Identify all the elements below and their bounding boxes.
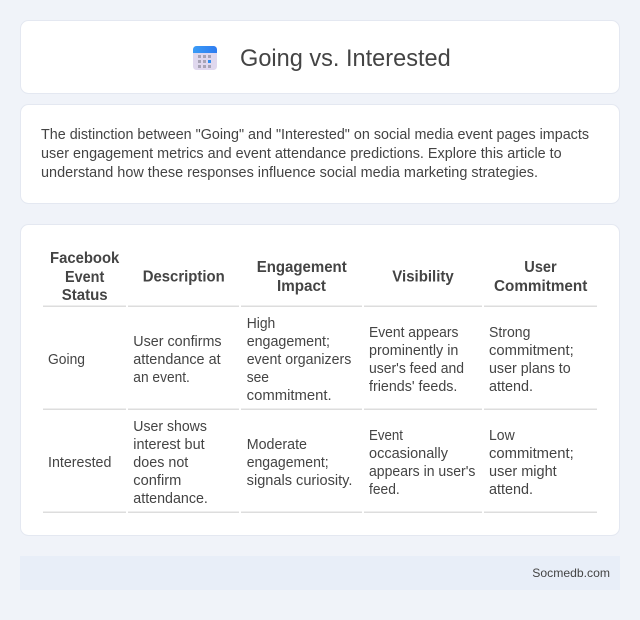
table row: Going: user plans to — [489, 361, 571, 377]
table row: Going: attendance at — [133, 352, 221, 368]
footer source text: Socmedb.com — [532, 566, 610, 580]
table header row: Impact — [277, 278, 327, 295]
text block: intro paragraph — [41, 127, 589, 181]
table row: Interested: Low — [489, 428, 515, 444]
table row: Interested: commitment; — [489, 446, 574, 462]
table row: Going: User confirms — [133, 334, 222, 350]
table row: Interested: engagement; — [247, 455, 329, 471]
text block: intro paragraph: understand how these responses influence social media marketing strategies. — [41, 165, 538, 181]
text block: intro paragraph: user engagement metrics and event attendance predictions. Explore this article to — [41, 146, 562, 162]
panel: comparison table — [20, 224, 620, 536]
table row: Interested: does not — [133, 455, 188, 471]
table header row: Commitment — [494, 278, 588, 295]
table row: Interested: interest but — [133, 437, 205, 453]
table row: Going — [48, 316, 574, 404]
table row: Interested: occasionally — [369, 446, 449, 462]
table header row: Facebook — [50, 250, 119, 267]
table row: Interested: appears in user's — [369, 464, 475, 480]
table row: Going: attend. — [489, 379, 533, 395]
table row: Going: see — [247, 370, 269, 386]
table row: Going: friends' feeds. — [369, 379, 457, 395]
table header row: User — [524, 259, 557, 276]
table row: Going: event organizers — [247, 352, 351, 368]
table row: Going: High — [247, 316, 275, 332]
table header row: Engagement — [257, 259, 347, 276]
table row: Going: commitment. — [247, 388, 332, 404]
table row: Interested: attend. — [489, 482, 533, 498]
table header row: Description — [143, 268, 225, 286]
table row: Interested: Interested — [48, 455, 111, 471]
table header row: Event — [65, 269, 105, 286]
title: Going vs. Interested — [240, 45, 451, 72]
table header row — [50, 250, 588, 304]
table row: Interested: Event — [369, 428, 403, 444]
table row: Going: Strong — [489, 325, 530, 341]
table header row: Visibility — [392, 268, 454, 286]
table row: Interested: confirm — [133, 473, 181, 489]
table header row: Status — [62, 287, 108, 304]
table row: Interested: signals curiosity. — [247, 473, 352, 489]
table row: Going: commitment; — [489, 343, 574, 359]
panel: intro — [20, 104, 620, 204]
text block: intro paragraph: The distinction between "Going" and "Interested" on social media event pages impacts — [41, 127, 589, 143]
table row: Going: Going — [48, 352, 85, 368]
table row: Going: an event. — [133, 370, 190, 386]
table row: Going: user's feed and — [369, 361, 464, 377]
panel: title card — [20, 20, 620, 94]
table row: Interested: Moderate — [247, 437, 307, 453]
table row: Interested: feed. — [369, 482, 400, 498]
table row: Going: prominently in — [369, 343, 458, 359]
table row: Going: Event appears — [369, 325, 458, 341]
table row: Interested: attendance. — [133, 491, 208, 507]
table row: Interested: user might — [489, 464, 557, 480]
icon: calendar — [193, 46, 217, 70]
table row: Going: engagement; — [247, 334, 330, 350]
table row: Interested: User shows — [133, 419, 207, 435]
footer bar — [20, 556, 620, 590]
table row: Interested — [48, 419, 574, 507]
